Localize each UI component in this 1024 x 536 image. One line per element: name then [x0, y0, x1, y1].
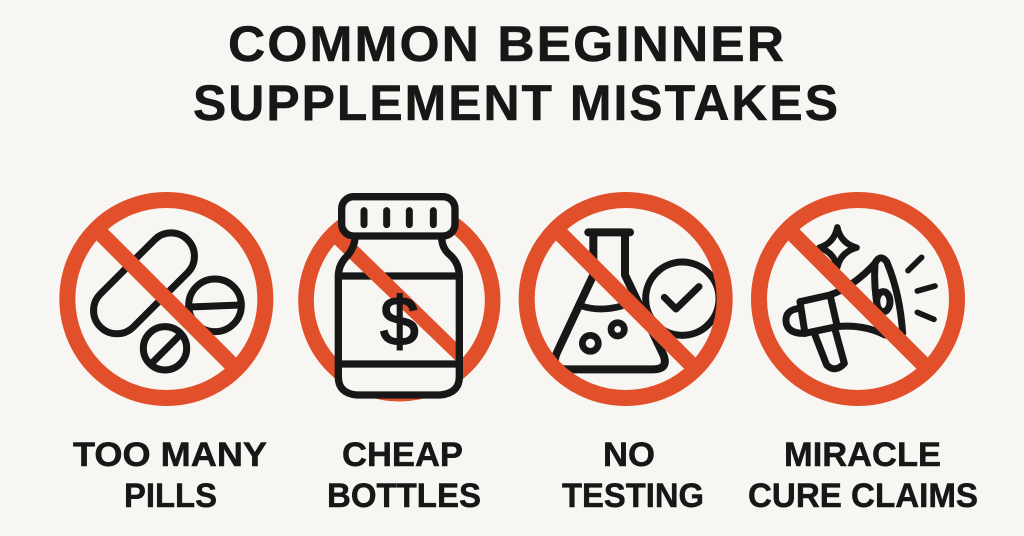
icon: round tablet: [189, 279, 241, 332]
prohibition ring: [67, 200, 265, 398]
label: miracle cure claims: MIRACLE: [784, 436, 941, 474]
prohibition ring: [759, 200, 957, 398]
title: [193, 16, 840, 131]
label: no testing: NO: [603, 436, 655, 474]
icon: bottle body fill: [338, 237, 459, 395]
label: no testing: TESTING: [562, 477, 704, 515]
icon: flask: [555, 232, 665, 369]
prohibition slash: [333, 233, 457, 360]
prohibition ring: [527, 200, 725, 398]
prohibition slash: [556, 229, 696, 369]
cap ridges: [364, 211, 433, 225]
label: miracle cure claims: CURE CLAIMS: [748, 477, 978, 515]
icon: check badge: [646, 262, 719, 335]
panel: too many pills icon: [67, 200, 265, 398]
label: no testing: [562, 436, 704, 515]
icon: megaphone: [786, 258, 903, 369]
label: cheap bottles: BOTTLES: [327, 477, 481, 515]
label: cheap bottles: [327, 436, 481, 515]
title: COMMON BEGINNER: [228, 16, 786, 72]
prohibition slash: [788, 229, 928, 369]
panel: miracle cure claims icon: [759, 200, 957, 398]
label: too many pills: TOO MANY: [73, 436, 267, 474]
icon: bottle cap: [342, 197, 455, 236]
icon: bottle outline: [338, 237, 459, 395]
label: too many pills: [73, 436, 267, 515]
prohibition ring: [306, 207, 493, 394]
icon: small tablet: [143, 327, 187, 370]
icon: dollar sign: $: [380, 284, 418, 360]
bottle label lines: [339, 276, 458, 364]
panel: no testing icon: [527, 200, 725, 398]
icon: capsule: [84, 223, 204, 343]
prohibition slash: [96, 229, 236, 369]
sound lines: [908, 257, 935, 319]
label: too many pills: PILLS: [124, 477, 217, 515]
panel: cheap bottles icon: [306, 197, 493, 395]
label: cheap bottles: CHEAP: [342, 436, 463, 474]
title: SUPPLEMENT MISTAKES: [193, 75, 840, 131]
icon: sparkle: [819, 227, 857, 267]
label: miracle cure claims: [748, 436, 978, 515]
